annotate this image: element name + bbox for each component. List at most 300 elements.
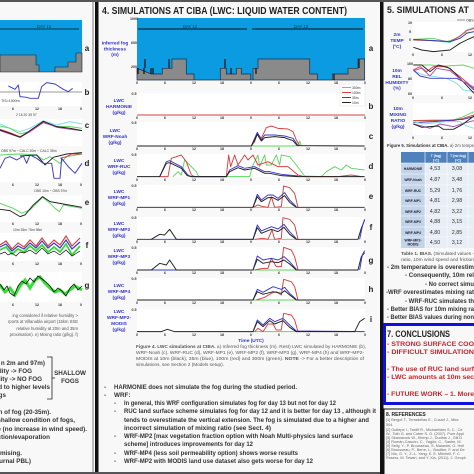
figure 4 caption <box>136 344 366 367</box>
chart g: LWC WRF-MP3: WRF-MP3 <box>108 254 131 260</box>
chart d: LWC WRF-RUC: 12 <box>306 178 310 182</box>
chart e: LWC WRF-MP1: 0 <box>250 208 252 212</box>
chart d: left relative humidity: 6 <box>12 183 14 187</box>
chart: 10m relative humidity: 10m <box>392 68 402 74</box>
chart d: LWC WRF-RUC: 6 <box>164 178 166 182</box>
chart g: LWC WRF-MP3: 6 <box>278 271 280 275</box>
chart b: left visibility: 6 <box>12 107 14 111</box>
chart b: LWC HARMONIE: HARMONIE <box>106 104 133 110</box>
chart e: LWC WRF-MP1: LWC <box>114 189 125 195</box>
chart d: LWC WRF-RUC: 0 <box>250 178 252 182</box>
chart: 10m mixing ratio: 12 <box>468 136 472 140</box>
conclusions text: - FUTURE WORK – 1. More <box>387 391 474 398</box>
references list: 504. <box>386 423 393 427</box>
chart h: LWC WRF-MP4: 0 <box>364 301 366 305</box>
conclusions text: - STRONG SURFACE COO <box>387 341 474 348</box>
chart f: left wind speed: 10m 35m 75m 98m <box>13 228 42 232</box>
discussion bullet text: RUC land surface scheme simulates fog for day 12 and it is better for day 13 , although it <box>124 408 377 415</box>
chart a: inferred fog thickness: 1000 <box>130 17 138 21</box>
chart g: LWC WRF-MP3: 0 <box>136 271 138 275</box>
chart d: LWC WRF-RUC: (g/kg) <box>112 170 126 176</box>
chart e: LWC WRF-MP1: 0 <box>136 208 138 212</box>
chart b: LWC HARMONIE: 18 <box>220 116 224 120</box>
chart e: LWC WRF-MP1: 18 <box>334 208 338 212</box>
chart f: LWC WRF-MP2: WRF-MP2 <box>108 227 131 233</box>
legend: heights: 35m <box>352 96 359 100</box>
figure 4 caption: Figure 4. LWC simulations at CIBA. a) Inferred fog thickness (m). Rest) LWC simulated by HARMONIE (b), <box>136 344 366 349</box>
chart: 10m relative humidity <box>385 62 474 100</box>
chart: 10m mixing ratio: 6 <box>441 136 443 140</box>
chart g: left wind speed near surface: 6 <box>12 303 14 307</box>
table 1: bias: HARMONIE <box>404 167 423 171</box>
table 1: bias: WRF-RUC <box>405 189 422 193</box>
chart i: LWC WRF-MP2-MODIS: 6 <box>278 333 280 337</box>
chart a: inferred fog thickness: 0 <box>250 81 252 85</box>
chart a: inferred fog thickness: 0 <box>136 81 138 85</box>
table 1 caption: ratio, 10m wind speed and friction <box>401 257 474 262</box>
heading: references: 8. REFERENCES <box>386 412 426 418</box>
chart a: inferred fog thickness: thickness <box>104 46 126 52</box>
chart i: LWC WRF-MP2-MODIS: 0 <box>364 333 366 337</box>
chart c: LWC WRF-Noah: 6 <box>164 147 166 151</box>
chart f: LWC WRF-MP2 <box>108 216 373 244</box>
chart h: LWC WRF-MP4: 12 <box>306 301 310 305</box>
chart e: LWC WRF-MP1: 6 <box>164 208 166 212</box>
references list: [2] Gultepe I., Tardif R., Michaelides S. C., Ce <box>386 428 463 432</box>
chart b: left visibility: 0 <box>80 107 82 111</box>
table 1: bias: 4,88 <box>430 219 440 225</box>
chart f: LWC WRF-MP2: 0 <box>250 240 252 244</box>
chart b: LWC HARMONIE: 6 <box>164 116 166 120</box>
chart a: inferred fog thickness: 12 <box>192 81 196 85</box>
chart: 10m relative humidity: 0 <box>412 96 414 100</box>
table 1: bias: WRF-MP2- <box>405 238 421 242</box>
chart d: left relative humidity: 0 <box>80 183 82 187</box>
table 1: bias: 4,87 <box>430 177 440 183</box>
chart i: LWC WRF-MP2-MODIS: 18 <box>220 333 224 337</box>
fog conclusions text <box>0 409 87 465</box>
chart g: LWC WRF-MP3: 18 <box>220 271 224 275</box>
chart c: LWC WRF-Noah: 12 <box>192 147 196 151</box>
chart h: LWC WRF-MP4: 6 <box>278 301 280 305</box>
chart c: LWC WRF-Noah: 12 <box>306 147 310 151</box>
chart g: LWC WRF-MP3: 6 <box>164 271 166 275</box>
figure 5 caption: Figure 5. Simulations at CIBA. a) 2m tempe <box>387 143 474 148</box>
left figure caption: relative humidity at 20m and 35m <box>16 326 79 331</box>
chart: 2m temperature: (ºC) <box>393 44 402 50</box>
legend: heights: 10m <box>352 101 359 105</box>
chart f: left wind speed: 6 <box>12 262 14 266</box>
chart a: inferred fog thickness: (m) <box>111 52 119 58</box>
chart e: LWC WRF-MP1: e <box>369 192 374 201</box>
table 1: bias: 3,15 <box>452 219 462 225</box>
chart b: LWC HARMONIE: 12 <box>192 116 196 120</box>
panel: 7. conclusions <box>384 324 474 404</box>
table 1: bias: 4,53 <box>430 166 440 172</box>
chart h: LWC WRF-MP4: LWC <box>114 283 125 289</box>
chart g: LWC WRF-MP3: 18 <box>334 271 338 275</box>
chart h: LWC WRF-MP4: 18 <box>220 301 224 305</box>
chart c: left temperature: 2 16 20 35 97 <box>16 113 37 117</box>
fog conclusions text: urnal PBL) <box>0 458 31 465</box>
chart e: left mixing ratio: OBS 10m ~ OBS 97m <box>34 189 67 193</box>
chart g: left wind speed near surface: 18 <box>58 303 62 307</box>
table 1: bias: 3,12 <box>452 240 462 246</box>
chart: 2m temperature: 6 <box>441 53 443 57</box>
chart i: LWC WRF-MP2-MODIS: 12 <box>306 333 310 337</box>
chart i: LWC WRF-MP2-MODIS: WRF-MP2- <box>107 315 131 321</box>
heading: conclusions: 7. CONCLUSIONS <box>387 329 450 339</box>
chart d: LWC WRF-RUC: 0.5 <box>132 153 136 157</box>
chart g: left wind speed near surface: 12 <box>35 303 39 307</box>
chart i: LWC WRF-MP2-MODIS: i <box>370 315 372 324</box>
chart: 10m relative humidity: 60 <box>408 92 412 96</box>
bias findings text <box>386 264 474 321</box>
chart: 10m mixing ratio: 10m <box>393 106 403 112</box>
chart d: left relative humidity: d <box>85 159 90 168</box>
chart: 2m temperature: OBS <box>466 18 474 22</box>
chart c: left temperature: c <box>85 121 90 130</box>
chart: 10m relative humidity: REL <box>392 74 402 80</box>
table 1: bias: WRF-MP2 <box>405 210 421 214</box>
table 1: bias: 4,50 <box>430 240 440 246</box>
chart g: left wind speed near surface: 0 <box>80 303 82 307</box>
chart e: LWC WRF-MP1: 12 <box>306 208 310 212</box>
chart e: LWC WRF-MP1: 18 <box>220 208 224 212</box>
chart a: left fog thickness <box>0 20 90 72</box>
table 1: bias: (ºC) <box>433 158 439 162</box>
chart a: left fog thickness: DAY 13 <box>37 24 52 29</box>
chart c: LWC WRF-Noah: 0 <box>364 147 366 151</box>
chart a: inferred fog thickness: 6 <box>278 81 280 85</box>
conclusions text: - The use of RUC land surf <box>387 366 474 373</box>
chart b: left visibility: b <box>85 88 90 97</box>
chart f: left wind speed: 0 <box>80 262 82 266</box>
chart a: inferred fog thickness: 12 <box>306 81 310 85</box>
chart g: LWC WRF-MP3 <box>108 246 374 275</box>
chart e: LWC WRF-MP1: 0 <box>364 208 366 212</box>
chart f: left wind speed <box>0 228 89 266</box>
chart: 10m mixing ratio: (g/kg) <box>391 124 405 130</box>
fog conclusions text: mising. <box>0 450 22 457</box>
chart h: LWC WRF-MP4: 0 <box>136 301 138 305</box>
chart a: inferred fog thickness: 0 <box>364 81 366 85</box>
chart i: LWC WRF-MP2-MODIS: 12 <box>192 333 196 337</box>
chart c: LWC WRF-Noah: 0.5 <box>132 121 136 125</box>
panel: 5. simulations at (right column) <box>385 5 474 321</box>
discussion bullet text: - <box>114 433 116 440</box>
chart: 2m temperature: 12 <box>468 53 472 57</box>
chart f: LWC WRF-MP2: 0 <box>136 240 138 244</box>
chart f: LWC WRF-MP2: 18 <box>334 240 338 244</box>
chart a: inferred fog thickness: 6 <box>164 81 166 85</box>
chart b: LWC HARMONIE: 0 <box>136 116 138 120</box>
chart e: LWC WRF-MP1: 6 <box>278 208 280 212</box>
panel: 8. references <box>384 409 474 474</box>
chart a: inferred fog thickness: DAY 12 <box>183 24 198 29</box>
chart e: LWC WRF-MP1: (g/kg) <box>112 201 126 207</box>
discussion bullet text: WRF-MP2 with MODIS land use dataset also gets worse for day 12 <box>124 458 313 465</box>
chart g: LWC WRF-MP3: 0 <box>364 271 366 275</box>
references list: [3] Skamarock W., Klemp J., Dudhia J., Gill D <box>386 436 462 440</box>
fog conclusions text: n of fog (20-35m). <box>0 409 51 416</box>
chart g: LWC WRF-MP3: 0.5 <box>132 246 136 250</box>
discussion bullet text: WRF-MP2 [max vegetation fraction option with Noah Multi-physics land surface <box>124 433 353 440</box>
chart e: LWC WRF-MP1: 0.5 <box>132 184 136 188</box>
chart i: LWC WRF-MP2-MODIS: MODIS <box>111 321 128 327</box>
chart h: LWC WRF-MP4: 0.5 <box>132 277 136 281</box>
chart e: LWC WRF-MP1: 12 <box>192 208 196 212</box>
chart b: LWC HARMONIE <box>106 84 374 120</box>
chart g: LWC WRF-MP3: g <box>369 256 374 265</box>
chart f: LWC WRF-MP2: 12 <box>306 240 310 244</box>
chart b: LWC HARMONIE: 0 <box>364 116 366 120</box>
chart: 2m temperature: 0 <box>412 53 414 57</box>
chart e: left mixing ratio: 0 <box>80 222 82 226</box>
left figure caption: rports at Villanubla airport (15km SSE <box>8 319 78 324</box>
table 1: bias: T (fog) <box>431 154 441 158</box>
chart b: LWC HARMONIE: 12 <box>306 116 310 120</box>
chart a: inferred fog thickness: 600 <box>131 41 137 45</box>
references list: Rosero, M. Tewari, and Y. Xia, (2011). J. Geoph <box>386 456 466 460</box>
discussion bullet text: - <box>114 450 116 457</box>
bias findings text: - 2m temperature is overestim <box>387 264 474 271</box>
table 1: bias: MODIS <box>407 242 419 246</box>
table 1: bias: WRF-Noah <box>404 178 422 182</box>
discussion bullet text: scheme] introduces improvements for day 12 <box>124 441 253 448</box>
chart d: left relative humidity: OBS 97m ~ CALC 20m ~ CALC 35m <box>1 149 57 153</box>
chart c: LWC WRF-Noah: 0 <box>136 147 138 151</box>
panel: left column observations <box>0 20 90 465</box>
table 1: bias: 3,08 <box>452 166 462 172</box>
chart c: LWC WRF-Noah: (g/kg) <box>108 140 122 146</box>
table 1: bias: 2,85 <box>452 230 462 236</box>
panel: 4. simulations at CIBA <box>102 5 377 465</box>
legend: heights: 100m <box>352 91 361 95</box>
chart c: LWC WRF-Noah: 6 <box>278 147 280 151</box>
chart i: LWC WRF-MP2-MODIS: (g/kg) <box>112 327 126 333</box>
chart f: LWC WRF-MP2: LWC <box>114 221 125 227</box>
chart g: left wind speed near surface <box>0 272 90 307</box>
references list: [7] Niu, G. Y., Z.-L. Yang, K. E. Mitchell, F. C <box>386 452 460 456</box>
chart g: LWC WRF-MP3: 0 <box>250 271 252 275</box>
chart h: LWC WRF-MP4: 12 <box>192 301 196 305</box>
chart: 10m relative humidity: (%) <box>393 86 401 92</box>
discussion bullet text: - <box>114 408 116 415</box>
chart i: LWC WRF-MP2-MODIS: 0.5 <box>132 308 136 312</box>
table 1: bias <box>401 152 474 248</box>
chart c: LWC WRF-Noah: 18 <box>220 147 224 151</box>
chart e: LWC WRF-MP1 <box>108 184 374 212</box>
chart c: LWC WRF-Noah: c <box>369 132 374 141</box>
chart b: LWC HARMONIE: (g/kg) <box>112 110 126 116</box>
chart i: LWC WRF-MP2-MODIS: 0 <box>136 333 138 337</box>
chart e: left mixing ratio <box>0 189 90 226</box>
shallow fog notes <box>0 357 86 399</box>
table 1: bias: WRF-MP1 <box>405 199 421 203</box>
chart d: LWC WRF-RUC: 18 <box>334 178 338 182</box>
chart d: LWC WRF-RUC <box>108 153 374 182</box>
table 1: bias: 3,48 <box>452 177 462 183</box>
chart d: LWC WRF-RUC: 12 <box>192 178 196 182</box>
references list: [4] Román-Cascón, C., Yagüe, C., Sastre, M. <box>386 440 462 444</box>
chart e: left mixing ratio: e <box>85 198 90 207</box>
chart: 10m relative humidity: 80 <box>408 77 412 81</box>
chart c: LWC WRF-Noah <box>103 121 374 151</box>
legend: heights <box>340 84 365 106</box>
chart f: left wind speed: 12 <box>35 262 39 266</box>
chart: 2m temperature: 10 <box>408 21 412 25</box>
chart: 2m temperature: TEMP <box>390 38 404 44</box>
chart i: LWC WRF-MP2-MODIS: 0 <box>250 333 252 337</box>
chart a: left fog thickness: a <box>85 44 90 53</box>
chart c: left temperature <box>0 113 90 146</box>
chart f: LWC WRF-MP2: 12 <box>192 240 196 244</box>
discussion bullet text: - <box>104 384 106 391</box>
chart b: LWC HARMONIE: b <box>369 102 374 111</box>
chart: 2m temperature: 2m <box>394 32 400 38</box>
chart b: left visibility: TIS=1000m <box>1 99 20 103</box>
chart a: inferred fog thickness: 200 <box>131 65 137 69</box>
table 1: bias: 4,82 <box>430 209 440 215</box>
table 1: bias: 5,29 <box>430 188 440 194</box>
chart g: LWC WRF-MP3: 12 <box>306 271 310 275</box>
table 1: bias: (ºC) <box>455 158 461 162</box>
table 1: bias: WRF-MP3 <box>405 220 421 224</box>
chart e: left mixing ratio: 12 <box>35 222 39 226</box>
chart i: LWC WRF-MP2-MODIS <box>107 308 372 337</box>
chart d: LWC WRF-RUC: 0 <box>364 178 366 182</box>
discussion bullet text: HARMONIE does not simulate the fog during the studied period. <box>114 384 297 391</box>
chart: 2m temperature: 5 <box>409 30 411 34</box>
discussion bullet text: WRF-MP4 (less soil permeability option) shows worse results <box>124 450 298 457</box>
conclusions text: - LWC amounts at 10m sec <box>387 374 474 381</box>
references list: W., Toth G. and Cober S. G. (2007). Pure Appl <box>386 432 464 436</box>
table 1 caption: Table 1. BIAS. (Simulated values - <box>401 251 474 256</box>
chart e: left mixing ratio: 6 <box>12 222 14 226</box>
chart c: LWC WRF-Noah: 18 <box>334 147 338 151</box>
chart b: LWC HARMONIE: LWC <box>114 98 125 104</box>
table 1: bias: 4,80 <box>430 230 440 236</box>
chart d: left relative humidity <box>0 149 90 187</box>
legend: heights: 300m <box>352 86 361 90</box>
chart: 2m temperature: 0 <box>409 38 411 42</box>
chart h: LWC WRF-MP4: 0 <box>250 301 252 305</box>
chart a: inferred fog thickness <box>102 17 374 85</box>
chart d: LWC WRF-RUC: d <box>369 162 374 171</box>
shallow fog notes: FOGS <box>61 378 79 385</box>
chart: 10m relative humidity: 6 <box>441 96 443 100</box>
chart g: LWC WRF-MP3: (g/kg) <box>112 260 126 266</box>
chart: 10m relative humidity: 12 <box>468 96 472 100</box>
figure 4 caption: MODIS at 10m (black), 35m (blue), 100m (red) and 300m (green). NOTE -> For a better description of <box>136 356 365 361</box>
figure 4 caption: simulations, see Section 2 (Models setup). <box>136 362 224 367</box>
chart a: inferred fog thickness: 18 <box>334 81 338 85</box>
discussion bullet text: - <box>114 400 116 407</box>
chart b: left visibility: 18 <box>58 107 62 111</box>
chart g: LWC WRF-MP3: LWC <box>114 248 125 254</box>
chart: 10m mixing ratio: RATIO <box>391 118 406 124</box>
left figure caption <box>8 313 79 337</box>
chart i: LWC WRF-MP2-MODIS: LWC <box>114 309 125 315</box>
chart d: LWC WRF-RUC: LWC <box>114 158 125 164</box>
chart i: LWC WRF-MP2-MODIS: 18 <box>334 333 338 337</box>
discussion bullet text: incorrect simulation of mixing ratio (see Sect. 4) <box>124 425 271 432</box>
chart f: left wind speed: f <box>86 241 89 250</box>
chart: 10m relative humidity: HUMIDITY <box>385 80 409 86</box>
chart a: inferred fog thickness: Inferred fog <box>102 40 128 46</box>
references list: [6] Brousseau, P., Berre, L., Bouttier, F. and De <box>386 448 465 452</box>
chart b: LWC HARMONIE: 0 <box>250 116 252 120</box>
heading: simulations at CIBA: 4. SIMULATIONS AT CIBA (LWC: LIQUID WATER CONTENT) <box>102 5 347 17</box>
chart f: LWC WRF-MP2: 0 <box>364 240 366 244</box>
chart a: inferred fog thickness: DAY 13 <box>294 24 309 29</box>
table 1: bias: 1,76 <box>452 188 462 194</box>
table 1: bias: WRF-MP4 <box>405 231 421 235</box>
table 1: bias: T (no fog) <box>450 154 466 158</box>
references list: [1] Bergot T., Terradellas E., Cuxart J., Mira <box>386 418 459 422</box>
chart: 10m mixing ratio: 0 <box>412 136 414 140</box>
table 1: bias: 2,98 <box>452 198 462 204</box>
conclusions text <box>387 341 474 398</box>
chart d: left relative humidity: 18 <box>58 183 62 187</box>
chart c: LWC WRF-Noah: WRF-Noah <box>103 134 127 140</box>
left figure caption: ing considered if relative humidity > <box>12 313 79 318</box>
table 1: bias: 4,81 <box>430 198 440 204</box>
chart: 2m temperature <box>390 18 474 57</box>
chart h: LWC WRF-MP4: h <box>369 285 374 294</box>
chart i: LWC WRF-MP2-MODIS: 6 <box>164 333 166 337</box>
chart d: left relative humidity: 12 <box>35 183 39 187</box>
chart d: LWC WRF-RUC: WRF-RUC <box>108 164 131 170</box>
discussion bullet text: WRF: <box>114 392 130 399</box>
discussion bullet text: - <box>114 458 116 465</box>
references list: [5] Seity, Y., P. Brousseau, S. Malardel, G. Hell <box>386 444 464 448</box>
chart h: LWC WRF-MP4: (g/kg) <box>112 295 126 301</box>
chart f: LWC WRF-MP2: 18 <box>220 240 224 244</box>
chart: 10m relative humidity: 100 <box>407 62 413 66</box>
x axis title: Time (UTC) <box>238 338 264 344</box>
chart b: LWC HARMONIE: 18 <box>334 116 338 120</box>
chart e: left mixing ratio: 18 <box>58 222 62 226</box>
chart d: LWC WRF-RUC: 18 <box>220 178 224 182</box>
chart b: left visibility <box>0 82 90 111</box>
chart b: LWC HARMONIE: 0.5 <box>132 92 136 96</box>
chart d: LWC WRF-RUC: 0 <box>136 178 138 182</box>
chart: 10m mixing ratio: MIXING <box>389 112 407 118</box>
chart f: LWC WRF-MP2: (g/kg) <box>112 233 126 239</box>
chart g: left wind speed near surface: g <box>85 281 90 290</box>
shallow fog notes: SHALLOW <box>54 370 86 377</box>
chart h: LWC WRF-MP4 <box>108 277 374 305</box>
chart f: LWC WRF-MP2: 6 <box>278 240 280 244</box>
chart c: LWC WRF-Noah: 0 <box>250 147 252 151</box>
chart e: LWC WRF-MP1: WRF-MP1 <box>108 195 131 201</box>
chart b: left visibility: 12 <box>35 107 39 111</box>
figure 4 caption: WRF-Noah (c), WRF-RUC (d), WRF-MP1 (e), WRF-MP2 (f), WRF-MP3 (g), WRF-MP4 (h) and WRF-MP2- <box>136 350 365 355</box>
chart f: LWC WRF-MP2: f <box>370 223 373 232</box>
bias findings text: - Consequently, 10m rel <box>405 272 474 279</box>
chart h: LWC WRF-MP4: 18 <box>334 301 338 305</box>
fog conclusions text: e (no increase in wind speed). <box>0 426 87 433</box>
discussion bullet text: In general, this WRF configuration simulates fog for day 13 but not for day 12 <box>124 400 336 407</box>
discussion bullet text <box>104 384 377 465</box>
chart: 10m mixing ratio <box>389 103 474 140</box>
table 1 caption <box>401 251 474 262</box>
references list <box>386 418 466 460</box>
chart a: inferred fog thickness: 18 <box>220 81 224 85</box>
chart a: inferred fog thickness: a <box>369 44 374 53</box>
